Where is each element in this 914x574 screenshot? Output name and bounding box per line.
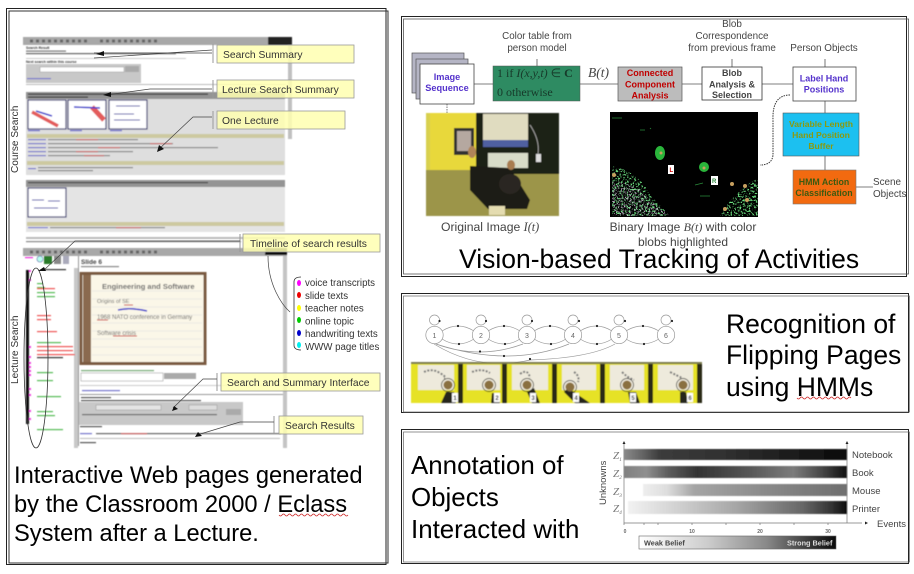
heading: Vision-based Tracking of Activities: Vision-based Tracking of Activities <box>459 244 859 274</box>
heading: Annotation of Objects Interacted with: Objects <box>411 484 499 512</box>
caption: interactive web pages <box>14 463 363 547</box>
flowchart: blob correspondence label <box>688 19 776 54</box>
legend: timeline colours: WWW page titles <box>305 342 379 353</box>
flowchart: Person Objects label: Person Objects <box>790 43 858 54</box>
chart: belief over events: 1 <box>619 457 622 463</box>
flowchart: Blob Analysis and Selection: Analysis & <box>709 80 756 90</box>
legend: timeline colours: online topic <box>305 316 354 328</box>
heading: Recognition of Flipping Pages using HMMs: Flipping Pages <box>726 340 901 370</box>
flowchart: Label Hand Positions: Label Hand <box>800 74 848 84</box>
course search screenshot: Next search within this course <box>26 60 77 64</box>
flowchart: HMM Action Classification: Classification <box>795 188 853 198</box>
caption: binary image <box>610 220 756 249</box>
chart: belief over events: Notebook <box>852 450 893 461</box>
flowchart: Image Sequence: Image <box>434 72 460 82</box>
image strip: six frames of page flipping: 1 <box>453 396 457 402</box>
flowchart: Variable Length Hand Position Buffer: Variable Length <box>789 119 853 129</box>
flowchart: Blob Analysis and Selection: Selection <box>712 90 752 100</box>
chart: belief over events: Events <box>877 519 906 530</box>
chart: belief over events: 2 <box>619 475 622 481</box>
flowchart: blob correspondence label: from previous frame <box>688 43 776 54</box>
chart: belief over events: 0 <box>624 529 627 535</box>
callout: Search Results: Search Results <box>285 421 355 432</box>
flowchart: Scene Objects label: Objects <box>873 189 907 200</box>
callout: Timeline of search results: Timeline of search results <box>250 239 367 250</box>
callout leaders and arrows <box>38 44 290 437</box>
flowchart: colour table label: person model <box>507 43 567 54</box>
callout: Search and Summary Interface: Search and Summary Interface <box>227 378 370 389</box>
course search screenshot: Search Result <box>26 46 50 50</box>
diagram: HMM state graph: 2 <box>479 333 483 340</box>
flowchart: Image Sequence: Sequence <box>425 83 469 93</box>
flowchart: HMM Action Classification <box>793 170 856 204</box>
diagram: HMM state graph: 3 <box>525 333 529 340</box>
flowchart: Scene Objects label: Scene <box>873 177 902 188</box>
label: Course Search: Course Search <box>10 106 21 173</box>
caption: binary image: Binary Image B(t) with color <box>610 220 756 234</box>
callout: Timeline of search results <box>243 234 380 252</box>
caption: binary image: blobs highlighted <box>638 235 728 249</box>
diagram: HMM state graph <box>426 315 675 364</box>
flowchart: Variable Length Hand Position Buffer: Hand Position <box>792 130 850 140</box>
flowchart: green threshold box: 1 if I(x,y,t) ∈ C <box>497 66 573 80</box>
legend: belief scale: Strong Belief <box>787 538 833 548</box>
chart: belief over events: Mouse <box>852 486 881 497</box>
flowchart: blob correspondence label: Blob <box>722 19 742 30</box>
image: binary blobs: R <box>712 179 717 185</box>
flowchart: Variable Length Hand Position Buffer: Buffer <box>808 141 834 151</box>
legend: timeline colours: voice transcripts <box>305 278 375 289</box>
chart: belief over events: Book <box>852 468 874 479</box>
heading: Recognition of Flipping Pages using HMMs: using HMMs <box>726 372 873 402</box>
flowchart: Connected Component Analysis: Analysis <box>631 90 669 100</box>
photo: original image <box>426 113 559 216</box>
chart: belief over events: Z <box>613 468 619 480</box>
flowchart: colour table label: Color table from <box>502 31 572 42</box>
course search screenshot <box>23 37 292 242</box>
chart: belief over events: Unknowns <box>598 460 609 505</box>
lecture search screenshot: Slide 6 <box>81 259 102 266</box>
callout: Lecture Search Summary: Lecture Search Summary <box>222 85 340 96</box>
flowchart: green threshold box <box>493 66 580 101</box>
heading: Recognition of Flipping Pages using HMMs: Recognition of <box>726 309 896 339</box>
flowchart: Connected Component Analysis: Component <box>625 80 675 90</box>
flowchart: Blob Analysis and Selection: Blob <box>722 68 742 78</box>
icon: timeline oval annotation <box>24 268 48 448</box>
flowchart: Blob Analysis and Selection <box>702 67 762 100</box>
image: binary blobs <box>610 112 758 217</box>
flowchart: Label Hand Positions <box>793 67 856 101</box>
callout: Search Results <box>279 416 363 434</box>
callout: Search and Summary Interface <box>221 373 380 391</box>
legend: timeline colours: slide texts <box>305 291 348 302</box>
image strip: six frames of page flipping <box>411 362 702 403</box>
chart: belief over events: Printer <box>852 504 880 515</box>
caption: interactive web pages: Interactive Web pages generated <box>14 463 363 489</box>
callout: Search Summary: Search Summary <box>223 50 303 61</box>
legend: belief scale <box>639 536 836 549</box>
chart: belief over events: 3 <box>618 493 622 499</box>
caption: original image: Original Image I(t) <box>441 220 539 234</box>
legend: timeline colours: teacher notes <box>305 304 364 314</box>
caption: interactive web pages: by the Classroom 2000 / Eclass <box>14 492 347 518</box>
panel: flipping pages <box>402 294 910 412</box>
flowchart: green threshold box: 0 otherwise <box>497 85 553 99</box>
flowchart: HMM Action Classification: HMM Action <box>799 177 849 187</box>
image strip: six frames of page flipping: 3 <box>531 396 535 402</box>
chart: belief over events: 10 <box>689 529 695 535</box>
callout: Search Summary <box>217 45 354 63</box>
callout: One Lecture <box>217 111 345 129</box>
lecture search screenshot <box>23 248 287 448</box>
lecture search screenshot: Engineering and Software <box>102 282 195 291</box>
legend: timeline colours <box>294 277 379 353</box>
label: Lecture Search: Lecture Search <box>10 316 21 384</box>
heading: Recognition of Flipping Pages using HMMs <box>726 309 901 402</box>
flowchart: Connected Component Analysis <box>618 67 682 101</box>
lecture search screenshot: 1968 NATO conference in Germany <box>97 315 192 321</box>
lecture search screenshot: Origins of SE <box>97 299 130 305</box>
chart: belief over events <box>598 441 906 549</box>
diagram: HMM state graph: 5 <box>617 333 621 340</box>
flowchart: Scene Objects label <box>873 177 907 200</box>
image strip: six frames of page flipping: 5 <box>631 396 635 402</box>
lecture search screenshot: Software crisis <box>97 331 136 337</box>
diagram: HMM state graph: 4 <box>571 333 575 340</box>
chart: belief over events: 20 <box>757 529 763 535</box>
chart: belief over events: 4 <box>619 509 622 516</box>
flowchart connectors <box>447 59 873 187</box>
image strip: six frames of page flipping: 4 <box>574 396 578 402</box>
chart: belief over events: Z <box>613 450 619 462</box>
panel: object annotation <box>402 430 910 564</box>
chart: belief over events: Z <box>613 503 619 515</box>
flowchart: Connected Component Analysis: Connected <box>627 68 673 78</box>
flowchart: colour table label <box>502 31 572 54</box>
panel: Vision-based tracking <box>402 16 908 276</box>
heading: Annotation of Objects Interacted with: Interacted with <box>411 516 579 544</box>
flowchart: Label Hand Positions: Positions <box>804 84 844 94</box>
image strip: six frames of page flipping: 2 <box>495 396 499 402</box>
caption: interactive web pages: System after a Lecture. <box>14 521 259 547</box>
legend: belief scale: Weak Belief <box>644 538 685 548</box>
flowchart: Image Sequence <box>412 53 474 104</box>
flowchart: blob correspondence label: Correspondence <box>695 31 769 42</box>
panel: Classroom 2000 web pages <box>6 8 388 564</box>
legend: timeline colours: handwriting texts <box>305 329 378 340</box>
heading: Annotation of Objects Interacted with: Annotation of <box>411 452 564 480</box>
chart: belief over events: 30 <box>825 529 831 535</box>
diagram: HMM state graph: 6 <box>664 333 668 340</box>
label: B(t): B(t) <box>588 65 609 80</box>
heading: Annotation of Objects Interacted with <box>411 452 579 544</box>
callout: Lecture Search Summary <box>217 80 354 98</box>
image strip: six frames of page flipping: 6 <box>688 396 692 402</box>
diagram: HMM state graph: 1 <box>433 333 437 340</box>
flowchart: Variable Length Hand Position Buffer <box>783 113 859 156</box>
image: binary blobs: L <box>670 168 674 174</box>
chart: belief over events: Z <box>613 486 619 498</box>
callout: One Lecture: One Lecture <box>222 116 279 127</box>
